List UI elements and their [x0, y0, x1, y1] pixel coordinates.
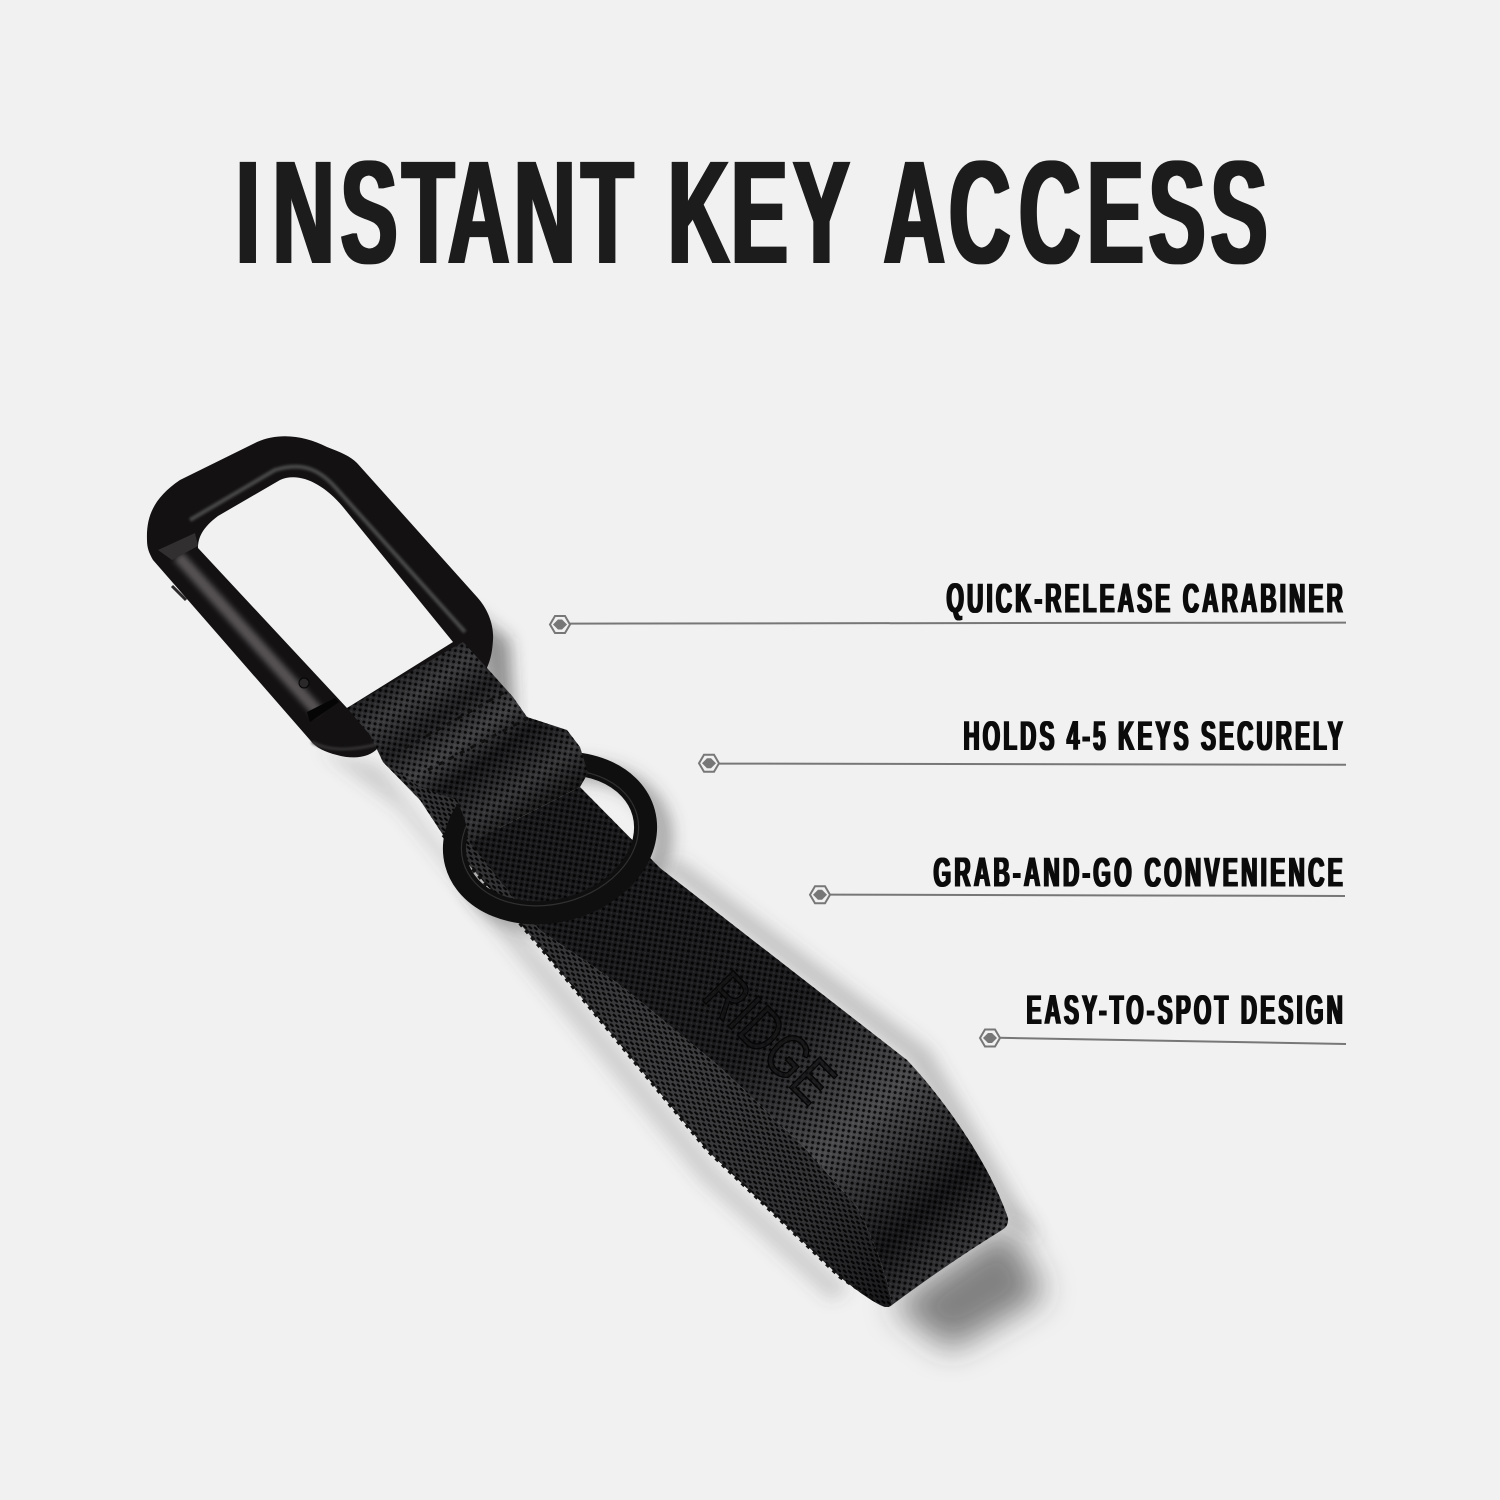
carabiner gate tube: [178, 556, 318, 712]
callout: grab-and-go convenience: [810, 849, 1346, 903]
marker: [550, 616, 570, 633]
callout: easy-to-spot design: [980, 986, 1346, 1046]
split key ring: [437, 742, 663, 934]
title: INSTANT KEY ACCESS: [236, 131, 1267, 295]
drop shadows: [320, 610, 1045, 1350]
strap lower band: [383, 745, 892, 1307]
carabiner gate joint: [158, 533, 198, 560]
carabiner: [147, 436, 493, 757]
carabiner rim highlight: [190, 467, 465, 632]
stitching: [405, 692, 528, 770]
strap upper section over ring: [347, 642, 588, 843]
marker: [810, 886, 830, 903]
product: carabiner key strap: [147, 436, 1045, 1350]
RIDGE deboss: RIDGE: [690, 959, 848, 1118]
marker: [699, 755, 719, 772]
callout: holds 4-5 keys securely: [699, 712, 1346, 772]
marker: [980, 1030, 1000, 1046]
strap top face: [470, 787, 1008, 1305]
callout: quick-release carabiner: [550, 574, 1346, 633]
